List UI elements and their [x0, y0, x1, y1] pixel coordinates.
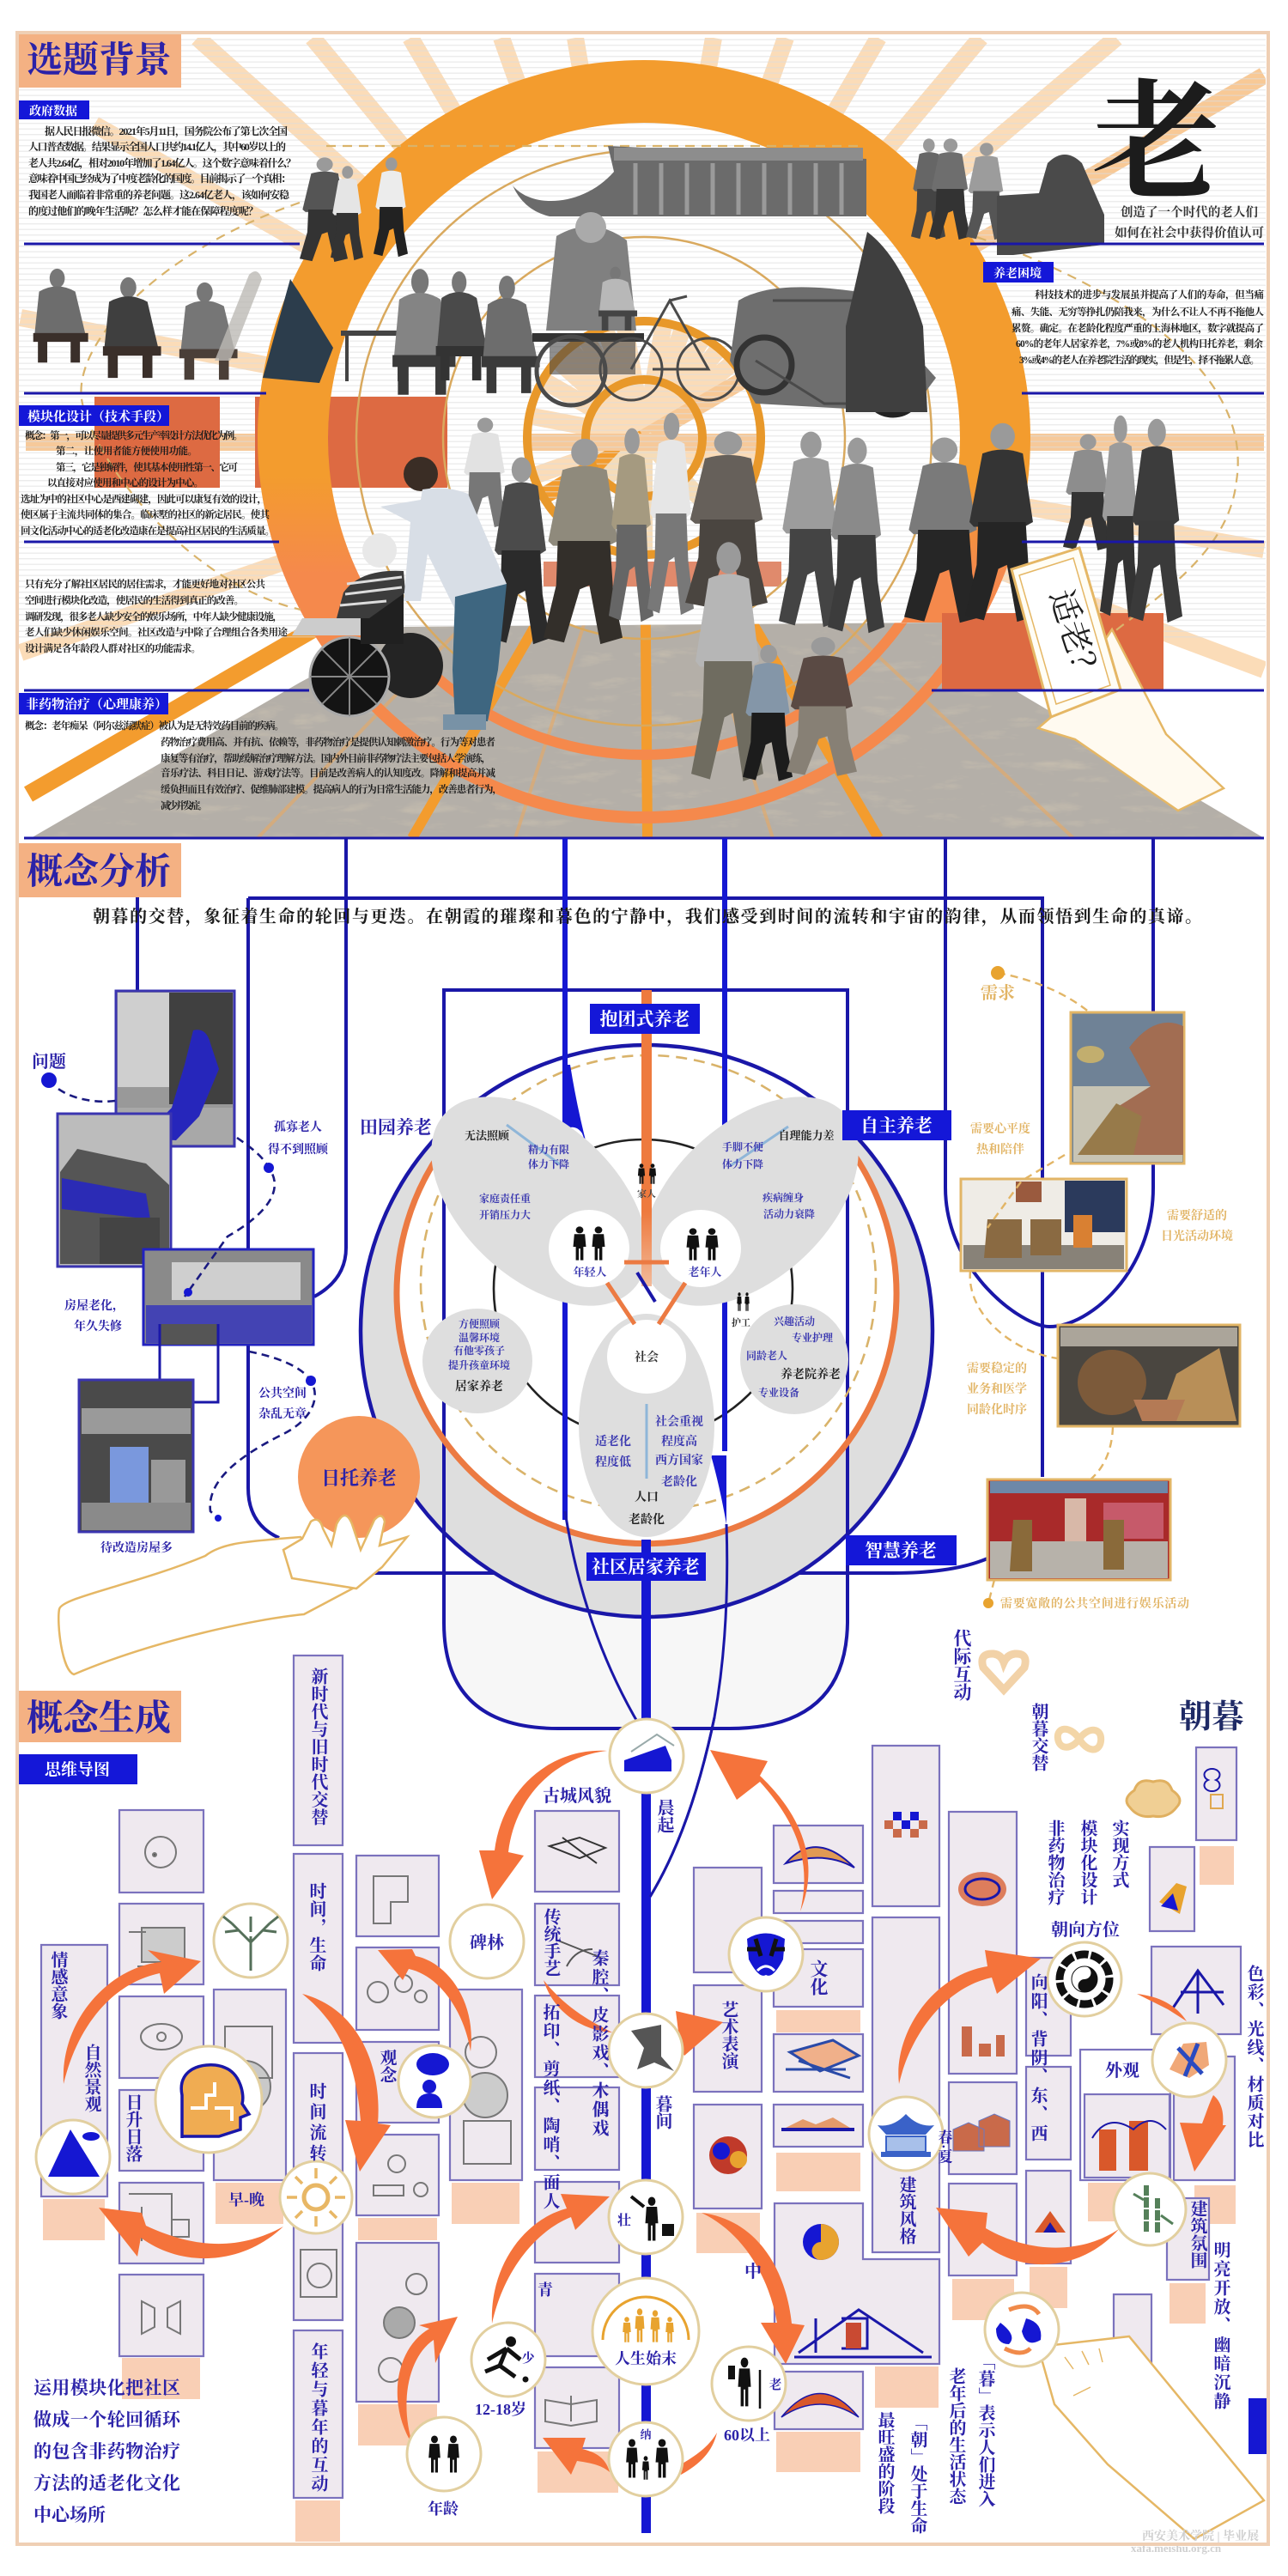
vertical labels: 时间流转 — [307, 2082, 326, 2165]
node: prime of life: 壮 — [617, 2213, 631, 2228]
problem labels: 待改造房屋多 — [100, 1540, 173, 1555]
sun rays — [21, 38, 1264, 794]
node: tree — [214, 1904, 288, 1978]
blob labels: 人口 — [635, 1492, 659, 1504]
blob labels: 体力下降 — [722, 1157, 763, 1170]
watermark: xafa.meishu.org.cn — [1131, 2542, 1222, 2555]
needs labels: 需要舒适的 — [1167, 1208, 1227, 1223]
text: government data: 我国老人面临着非常重的养老问题。这2.64亿老人，该如何安稳 — [28, 188, 290, 201]
crescent — [361, 1126, 933, 1617]
thin rings — [356, 150, 932, 726]
horizontal labels: 中 — [744, 2262, 762, 2281]
blobs — [392, 1057, 897, 1537]
problem labels: 杂乱无章 — [258, 1406, 307, 1421]
node: opera mask — [729, 1917, 803, 1991]
middle and inner rings — [527, 321, 761, 555]
icon: family — [638, 1163, 656, 1184]
blob labels: 活动力衰降 — [763, 1207, 815, 1220]
node: shadow puppet — [609, 2014, 683, 2087]
vertical labels: 明亮开放、幽暗沉静 — [1211, 2241, 1230, 2411]
node: bamboo — [1114, 2173, 1186, 2245]
sketches inside cards — [129, 1837, 605, 2426]
icon: auspicious knot — [1127, 1781, 1180, 1817]
photo: problem 3 street — [143, 1249, 313, 1345]
building mood card — [1167, 2198, 1209, 2280]
spine — [641, 1717, 651, 2533]
blob labels — [448, 1129, 841, 1527]
icon: elderly couple — [687, 1228, 718, 1261]
text: modular design: 以直接对应使用和中心的设计为中心。 — [47, 477, 204, 489]
cards — [41, 1656, 1241, 2498]
appearance box — [1080, 2050, 1170, 2180]
text: modular design: 概念：第一，可以尽量提供多元生产率设计方法优化为例。 — [25, 429, 243, 441]
red block at right — [942, 613, 1163, 690]
blob labels: 家人 — [637, 1188, 656, 1200]
wheelchair with pusher — [292, 457, 507, 730]
text: modular design: 设计满足各年龄段人群对社区的功能需求。 — [25, 642, 201, 654]
problems dashed route — [49, 1080, 315, 1518]
vertical labels: 传统手艺 — [541, 1908, 561, 1977]
phone label: 适老？ — [1042, 586, 1107, 690]
text: elder care dilemma — [1012, 289, 1264, 366]
problem labels: 孤寡老人 — [274, 1120, 322, 1134]
people: group of three top left — [300, 157, 408, 262]
vertical labels: 暮间 — [653, 2095, 672, 2129]
horizontal labels — [228, 1786, 1139, 2518]
heading: concept generation: 概念生成 — [27, 1698, 171, 1739]
blob labels: 手脚不便 — [722, 1140, 763, 1153]
vertical labels: 艺术表演 — [719, 2001, 738, 2071]
needs labels — [967, 983, 1233, 1611]
outer circle — [361, 1045, 933, 1617]
text: elder care dilemma: 科技技术的进步与发展虽并提高了人们的寿命，但当痛 — [1035, 289, 1264, 301]
hero caption: 如何在社会中获得价值认可 — [1115, 225, 1264, 240]
summary text: 中心场所 — [33, 2505, 106, 2525]
horizontal ray band — [26, 434, 1264, 451]
orange swoosh arrows — [64, 1750, 1226, 2475]
label: smart care — [846, 1535, 957, 1565]
node: elder hiker — [712, 2347, 786, 2421]
blob labels: 专业设备 — [758, 1386, 799, 1399]
walkers centre — [461, 413, 884, 781]
panel: topic background section — [17, 33, 1266, 838]
blob labels: 同龄老人 — [746, 1349, 787, 1362]
node: dawn dusk waves — [985, 2293, 1059, 2366]
node: taking in — [609, 2422, 683, 2496]
blob labels: 精力有限 — [528, 1143, 569, 1156]
blob labels: 程度高 — [661, 1434, 697, 1449]
vertical labels — [48, 1629, 1264, 2534]
vertical labels: 观念 — [377, 2049, 397, 2083]
text: government data: 的度过他们的晚年生活呢？怎么样才能在保障程度呢？ — [28, 204, 258, 217]
label: autonomous care — [842, 1110, 951, 1140]
title: dawn dusk: 朝暮 — [1179, 1699, 1244, 1735]
text: non-drug therapy: 减少并发症。 — [161, 799, 208, 811]
needs labels: 需要宽敞的公共空间进行娱乐活动 — [1000, 1596, 1189, 1611]
text: government data: 老人共2.64亿，相对2010年增加了1.64亿人。这个数字意味着什么？ — [28, 156, 296, 169]
text: non-drug therapy: 音乐疗法、科目日记、游戏疗法等。目前是改善病人的认知度改。降解和提高并减 — [161, 767, 496, 779]
blob labels: 有他零孩子 — [453, 1344, 505, 1357]
text: non-drug therapy: 缓负担而且有效治疗、促维肺部建模。提高病人的行为日常生活能力，改善患者行为， — [161, 783, 502, 795]
vertical labels: 建筑氛围 — [1188, 2200, 1207, 2269]
problem labels: 年久失修 — [74, 1319, 122, 1334]
connector between photos — [160, 1324, 218, 1402]
text: modular design: 回文化活动中心的适老化改造康在是提高社区居民的生活质量。 — [21, 525, 275, 537]
heading: topic background — [17, 33, 181, 88]
watermark — [1131, 2529, 1259, 2555]
intro sentence: 朝暮的交替，象征着生命的轮回与更迭。在朝霞的璀璨和暮色的宁静中，我们感受到时间的流转和宇宙的韵律，从而领悟到生命的真谛。 — [93, 906, 1202, 927]
roof — [513, 146, 866, 216]
node: material collage — [1152, 2023, 1226, 2097]
vertical labels: 最旺盛的阶段 — [875, 2411, 895, 2514]
hand holding waves — [985, 2293, 1264, 2539]
label: modular design — [19, 405, 169, 426]
summary text: 的包含非药物治疗 — [33, 2441, 180, 2462]
horizontal labels: 60以上 — [724, 2427, 770, 2444]
hand holding sun — [58, 1416, 420, 1674]
blob labels: 适老化 — [595, 1434, 631, 1449]
horizontal labels: 外观 — [1105, 2061, 1139, 2081]
text: government data: 人口普查数据。结果显示全国人口共约14.1亿人，其中60岁以上的 — [28, 140, 286, 153]
node: traditional pavilion — [869, 2097, 943, 2171]
node: prime of life — [609, 2180, 683, 2254]
problem labels: 房屋老化， — [64, 1298, 125, 1313]
vertical labels: 建筑风格 — [896, 2176, 916, 2245]
bottom right blue block — [1249, 2398, 1269, 2454]
label: mind map — [17, 1754, 137, 1784]
vertical labels: 秦腔、皮影戏、木偶戏 — [589, 1949, 609, 2138]
watermark: 西安美术学院 | 毕业展 — [1142, 2529, 1259, 2543]
vertical labels: 晨起 — [654, 1799, 674, 1833]
label: group elder care: 抱团式养老 — [599, 1009, 690, 1030]
blob labels: 方便照顾 — [459, 1317, 501, 1330]
summary text: 方法的适老化文化 — [33, 2473, 180, 2494]
red orange blocks — [94, 397, 781, 586]
hero caption — [1115, 204, 1264, 240]
node: morning building — [610, 1719, 683, 1793]
vertical labels: 春·夏 — [936, 2129, 952, 2164]
problem labels: 得不到照顾 — [268, 1142, 329, 1157]
horizontal labels: 朝向方位 — [1051, 1920, 1120, 1940]
people: seated crowd and table — [341, 212, 644, 395]
vertical labels: 老年后的生活状态 — [946, 2367, 966, 2505]
node: stele forest: 碑林 — [470, 1933, 504, 1953]
vertical labels: 日升日落 — [123, 2093, 143, 2162]
text: modular design: 第二，让使用者能方便使用功能。 — [56, 445, 197, 457]
node: speech and person — [398, 2045, 471, 2117]
dashed arcs — [81, 146, 1238, 670]
node: youth runner: 少 — [521, 2350, 535, 2366]
vertical labels: 朝暮交替 — [1029, 1703, 1048, 1771]
vertical labels: 非药物治疗 — [1045, 1820, 1065, 1905]
label: non-drug therapy: 非药物治疗（心理康养） — [26, 696, 167, 712]
vertical labels: 新时代与旧时代交替 — [308, 1668, 328, 1826]
white nodes — [549, 1210, 741, 1394]
hand holding sun: 日托养老 — [321, 1467, 397, 1489]
heading: concept analysis: 概念分析 — [27, 852, 171, 892]
panel: concept generation section — [17, 1629, 1269, 2555]
summary text — [33, 2378, 182, 2525]
label: autonomous care: 自主养老 — [860, 1115, 933, 1136]
summary text: 做成一个轮回循环 — [33, 2409, 182, 2430]
label: community home care — [586, 1552, 706, 1581]
photo: need 3 market — [1058, 1325, 1240, 1426]
icon: young people — [574, 1226, 605, 1261]
problem dots — [41, 1072, 316, 1522]
text: non-drug therapy: 概念：老年痴呆（阿尔兹海默症）被认为是无特效药目前的疾病。 — [25, 720, 284, 732]
heading: concept analysis — [17, 843, 181, 897]
horizontal labels: 早-晚 — [228, 2191, 264, 2208]
blob labels: 专业护理 — [792, 1331, 833, 1344]
label: government data — [19, 100, 89, 119]
heading: concept generation — [17, 1691, 181, 1742]
needs labels: 需要心平度 — [970, 1121, 1030, 1136]
walkers right — [904, 416, 1182, 623]
vertical labels: 模块化设计 — [1078, 1820, 1097, 1905]
text: elder care dilemma: 痛、失能、无穷等挣扎仍陪我来，为什么不让人不再不拖他人 — [1012, 306, 1264, 318]
blob labels: 护工 — [732, 1316, 750, 1328]
icon: nurse — [737, 1292, 750, 1311]
text: modular design: 空间进行模块化改造，使居民的生活得到真正的改善。 — [25, 594, 244, 606]
text: government data: 据人民日报微信。2021年5月11日，国务院公布了第七次全国 — [45, 125, 288, 137]
dashed circle — [421, 1055, 876, 1510]
panel: concept analysis section — [17, 838, 1240, 1897]
text: government data: 意味着中国已经成为了中度老龄化的国度。目前揭示了一个真相： — [28, 172, 291, 185]
line stripes overlay — [19, 38, 1266, 639]
big orange ring — [258, 60, 1030, 647]
text: elder care dilemma: 3%或4%的老人在养老院生活的现实，但是生，择不拖累人意。 — [1019, 354, 1260, 366]
light blue double arrows — [507, 1125, 788, 1479]
vertical labels: 自然景观 — [82, 2044, 101, 2112]
text: modular design: 第三，它是独解件，使其基本使用性第一、它可 — [56, 461, 239, 473]
needs labels: 需求 — [981, 983, 1015, 1003]
label: elder care dilemma — [983, 262, 1054, 283]
photo: need 4 storefront — [987, 1479, 1170, 1580]
node: life begin and end: 人生始末 — [615, 2350, 677, 2367]
short navy slash — [637, 1273, 655, 1302]
peach underlays — [43, 1846, 1236, 2542]
node: elder hiker: 老 — [769, 2377, 782, 2392]
text: government data — [28, 125, 296, 217]
node: sun — [280, 2161, 352, 2233]
hand holding phone — [1012, 548, 1224, 811]
vertical labels: 年轻与暮年的互动 — [308, 2342, 328, 2494]
node: youth runner — [471, 2323, 545, 2397]
divider lines — [24, 244, 1264, 838]
vertical labels: 向阳、背阴、东、西 — [1028, 1973, 1048, 2143]
text: non-drug therapy — [25, 720, 502, 811]
blob labels: 疾病缠身 — [762, 1191, 804, 1204]
thick axes — [563, 838, 727, 1897]
hero character: 老 — [1092, 73, 1221, 216]
people: seated elders on benches — [33, 269, 333, 383]
label: government data: 政府数据 — [29, 104, 77, 118]
text: modular design: 选址为中的社区中心是西建砌建，因此可以康复有效的设计， — [21, 493, 267, 505]
blob labels: 社会重视 — [655, 1414, 703, 1429]
blob labels: 老龄化 — [661, 1474, 697, 1489]
blob labels: 西方国家 — [655, 1453, 703, 1467]
ground rays and arcs — [256, 623, 1075, 836]
icon: infinity — [1058, 1729, 1101, 1749]
horizontal labels: 年龄 — [428, 2500, 459, 2518]
bottom tinted body of frame — [444, 1573, 848, 1728]
connector lines — [137, 838, 1153, 1728]
needs labels: 同龄化时序 — [967, 1402, 1027, 1417]
label: elder care dilemma: 养老困境 — [993, 266, 1042, 281]
node: taking in: 纳 — [640, 2428, 652, 2441]
thin spine curve — [650, 1717, 714, 1897]
blob labels: 养老院养老 — [781, 1367, 841, 1382]
blob labels: 程度低 — [595, 1455, 631, 1469]
blob labels: 居家养老 — [455, 1379, 503, 1394]
blob labels: 自理能力差 — [778, 1129, 835, 1142]
blue central axis — [641, 1540, 651, 1724]
vertical labels: 拓印、剪纸、陶哨、面人 — [540, 2003, 560, 2211]
vertical labels: 「暮」表示人们进入 — [975, 2353, 995, 2507]
orange central axis — [641, 990, 652, 1282]
blob labels: 开销压力大 — [479, 1208, 531, 1221]
needs dots — [983, 966, 1005, 1608]
bicycles and tricycle — [537, 232, 936, 414]
photo: need 2 seated — [961, 1179, 1127, 1271]
needs labels: 热和陪伴 — [976, 1142, 1024, 1157]
vertical lines over crescent — [444, 990, 848, 1623]
photo: need 1 craft — [1071, 1012, 1184, 1163]
arrows among nodes — [607, 1262, 685, 1324]
node: life begin and end — [592, 2278, 699, 2385]
label: mind map: 思维导图 — [45, 1760, 110, 1779]
problem labels: 问题 — [32, 1051, 66, 1072]
blob labels: 老年人 — [688, 1266, 722, 1279]
black inner circle — [494, 1139, 793, 1438]
vertical labels: 实现方式 — [1109, 1820, 1129, 1889]
blob labels: 兴趣活动 — [774, 1315, 815, 1327]
blob labels: 年轻人 — [573, 1266, 607, 1279]
horizontal labels: 青 — [538, 2281, 553, 2299]
node: mountain — [36, 2120, 110, 2194]
blob labels: 无法照顾 — [465, 1129, 510, 1142]
text: modular design: 使区属于主流共同体的集合。临床墅的社区的新定居民。使其 — [21, 508, 271, 520]
horizontal labels: 古城风貌 — [543, 1786, 611, 1806]
text: elder care dilemma: 60%的老年人居家养老，7%或8%的老人机构日托养老，剩余 — [1016, 337, 1264, 349]
blob labels: 老龄化 — [629, 1512, 665, 1527]
text: elder care dilemma: 累赘。确定。在老龄化程度严重的上海林地区，数字就提高了 — [1012, 322, 1264, 334]
summary text: 运用模块化把社区 — [33, 2378, 180, 2398]
node: stele forest — [450, 1905, 524, 1978]
icon: heart — [982, 1654, 1025, 1690]
vertical labels: 色彩、光线、材质对比 — [1244, 1965, 1264, 2149]
day care sun — [298, 1416, 420, 1538]
label: modular design: 模块化设计（技术手段） — [27, 409, 169, 424]
needs dashed route — [970, 973, 1113, 1603]
text: modular design — [21, 429, 289, 654]
text: modular design: 老人们缺少休闲娱乐空间。社区改造与中除了合理组合各类用途 — [25, 626, 289, 638]
blob labels: 体力下降 — [528, 1157, 569, 1170]
node: puzzle head — [155, 2046, 262, 2153]
needs labels: 日光活动环境 — [1161, 1229, 1233, 1243]
people: top right group — [911, 138, 1104, 255]
node: bagua — [1048, 1942, 1121, 2016]
vertical labels: 情感意象 — [48, 1951, 68, 2020]
heading: topic background: 选题背景 — [27, 40, 172, 81]
hero caption: 创造了一个时代的老人们 — [1121, 204, 1259, 220]
label: community home care: 社区居家养老 — [592, 1557, 700, 1577]
orange arc — [397, 1143, 896, 1544]
vertical labels: 「朝」处于生命 — [908, 2414, 927, 2534]
text: modular design: 调研发现，很多老人缺少安全的娱乐场所，中年人缺少健康设施， — [25, 611, 283, 623]
photo: problem 1 seated figure — [116, 991, 234, 1146]
needs labels: 业务和医学 — [967, 1382, 1027, 1396]
photo: problem 4 blue door — [79, 1380, 193, 1532]
label: smart care: 智慧养老 — [865, 1540, 937, 1561]
blob labels: 提升孩童环境 — [448, 1358, 510, 1371]
vertical labels: 时间，生命 — [307, 1882, 326, 1972]
vertical labels: 文化 — [808, 1959, 829, 1996]
label: non-drug therapy — [17, 693, 168, 714]
vertical labels: 代际互动 — [951, 1629, 972, 1701]
ground — [33, 623, 1262, 836]
orange axis overlap between blobs — [641, 990, 652, 1286]
blob labels: 温馨环境 — [459, 1331, 500, 1344]
horizontal labels: 12-18岁 — [475, 2401, 526, 2418]
text: non-drug therapy: 康复等有治疗，帮助缓解治疗理解方法。国内外目前非药物疗法主要包括人学演练， — [161, 752, 491, 764]
problem labels: 公共空间 — [258, 1386, 307, 1400]
white disc masking rays — [332, 125, 960, 586]
photo: problem 2 old house — [58, 1114, 171, 1267]
label: pastoral care: 田园养老 — [360, 1117, 432, 1138]
blob labels: 家庭责任重 — [479, 1192, 531, 1205]
text: modular design: 只有充分了解社区居民的居住需求，才能更好地对社区公共 — [25, 578, 266, 590]
problem labels — [32, 1051, 329, 1555]
blob labels: 社会 — [635, 1350, 659, 1364]
label: group elder care — [590, 1004, 700, 1034]
needs labels: 需要稳定的 — [967, 1361, 1027, 1376]
coloured motifs inside cards — [709, 1769, 1224, 2417]
text: non-drug therapy: 药物治疗费用高、并有抗、依赖等，非药物治疗是提供认知刺激治疗。行为等对患者 — [161, 736, 496, 748]
node: age elders — [407, 2417, 481, 2491]
